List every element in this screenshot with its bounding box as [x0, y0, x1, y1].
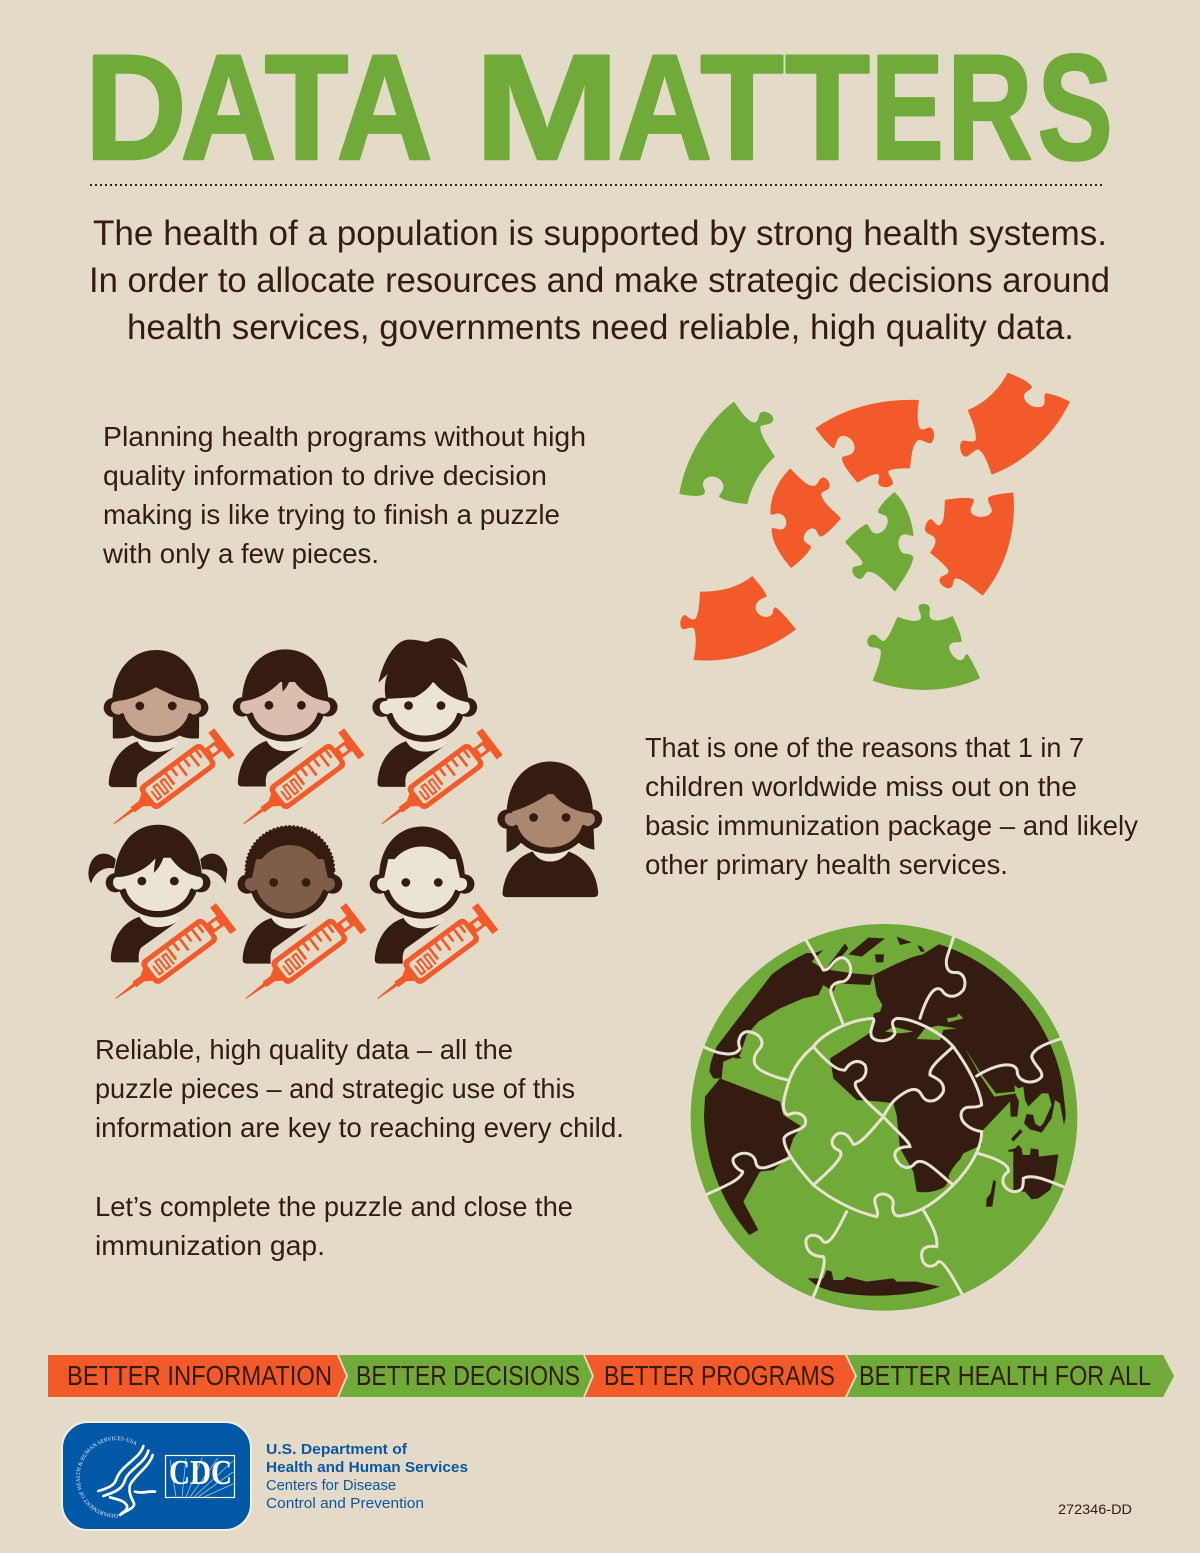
text block: reliable data: Reliable, high quality data – all the	[95, 1034, 513, 1065]
puzzle piece: orange top right	[960, 373, 1070, 475]
department text: Health and Human Services	[266, 1460, 468, 1476]
puzzle piece: green centre	[845, 492, 914, 592]
text block: reliable data: information are key to reaching every child.	[95, 1112, 624, 1143]
text block: 1 in 7 children: children worldwide miss out on the	[645, 771, 1077, 802]
puzzle piece: orange middle left	[770, 468, 841, 568]
text block: 1 in 7 children: That is one of the reasons that 1 in 7	[645, 732, 1084, 763]
title: A	[180, 23, 277, 191]
logo: HHS and CDC	[61, 1421, 252, 1531]
icon: HHS eagle	[98, 1446, 155, 1515]
document code: 272346-DD	[1058, 1501, 1132, 1517]
child 1: vaccinated girl	[104, 650, 235, 837]
puzzle seams	[703, 938, 1063, 1297]
title: D	[84, 23, 187, 191]
child 4: vaccinated girl with pigtails	[88, 825, 236, 1012]
puzzle piece: green upper left	[679, 402, 775, 504]
department text: U.S. Department of	[266, 1442, 407, 1458]
text block: planning health programs: quality information to drive decision	[103, 460, 547, 491]
title: T	[265, 23, 348, 191]
intro text: The health of a population is supported by strong health systems.	[93, 214, 1107, 253]
puzzle piece: orange lower left	[680, 576, 796, 661]
title: A	[336, 23, 433, 191]
child 7: unvaccinated child	[497, 762, 602, 897]
puzzle piece: green bottom	[867, 604, 980, 690]
child 5: vaccinated child with curly hair	[235, 826, 366, 1012]
text block: planning health programs: with only a few pieces.	[102, 538, 379, 569]
child 2: vaccinated child	[233, 649, 364, 837]
seal text: DEPARTMENT OF HEALTH & HUMAN SERVICES·USA	[76, 1436, 136, 1518]
intro text: In order to allocate resources and make strategic decisions around	[89, 261, 1110, 300]
department text: Control and Prevention	[266, 1496, 424, 1512]
globe made of puzzle pieces	[691, 924, 1077, 1311]
arrow ribbon	[48, 1355, 1174, 1397]
children with syringes	[88, 638, 602, 1012]
title	[84, 23, 1113, 191]
continents	[704, 937, 1066, 1296]
puzzle piece: orange middle right	[925, 493, 1014, 596]
arrow: better decisions	[339, 1355, 592, 1397]
text block: 1 in 7 children: other primary health services.	[645, 849, 1008, 880]
title: T	[700, 23, 784, 191]
title: A	[617, 23, 712, 191]
department text: Centers for Disease	[266, 1478, 396, 1494]
text block: planning health programs	[102, 421, 586, 569]
text block: planning health programs: making is like trying to finish a puzzle	[103, 499, 560, 530]
title: E	[871, 23, 944, 191]
text block: reliable data: Let’s complete the puzzle and close the	[95, 1191, 573, 1222]
arrow: better information	[48, 1355, 346, 1397]
title: T	[785, 23, 870, 191]
globe disc	[691, 924, 1077, 1311]
green seas over continents	[885, 1013, 1015, 1182]
arrow: better programs	[585, 1355, 855, 1397]
intro text	[89, 214, 1110, 347]
arrow: better health for all: BETTER HEALTH FOR ALL	[859, 1360, 1151, 1391]
title: R	[947, 23, 1033, 191]
arrow: better information: BETTER INFORMATION	[67, 1360, 332, 1391]
scattered puzzle pieces	[679, 373, 1070, 690]
text block: reliable data: puzzle pieces – and strategic use of this	[95, 1073, 575, 1104]
CDC box: CDC	[169, 1453, 232, 1492]
child 6: vaccinated boy with short hair	[367, 826, 498, 1012]
text block: reliable data: immunization gap.	[95, 1230, 325, 1261]
title: M	[474, 23, 620, 191]
arrow: better health for all	[847, 1355, 1174, 1397]
text block: reliable data	[95, 1034, 624, 1261]
arrow: better decisions: BETTER DECISIONS	[356, 1360, 580, 1391]
department text	[266, 1442, 468, 1512]
title: S	[1038, 23, 1113, 191]
text block: 1 in 7 children	[645, 732, 1138, 880]
text block: planning health programs: Planning health programs without high	[103, 421, 586, 452]
intro text: health services, governments need reliable, high quality data.	[127, 308, 1074, 347]
arrow: better programs: BETTER PROGRAMS	[604, 1360, 835, 1391]
puzzle piece: orange top centre	[815, 400, 934, 487]
text block: 1 in 7 children: basic immunization package – and likely	[645, 810, 1138, 841]
child 3: vaccinated boy	[372, 638, 503, 837]
